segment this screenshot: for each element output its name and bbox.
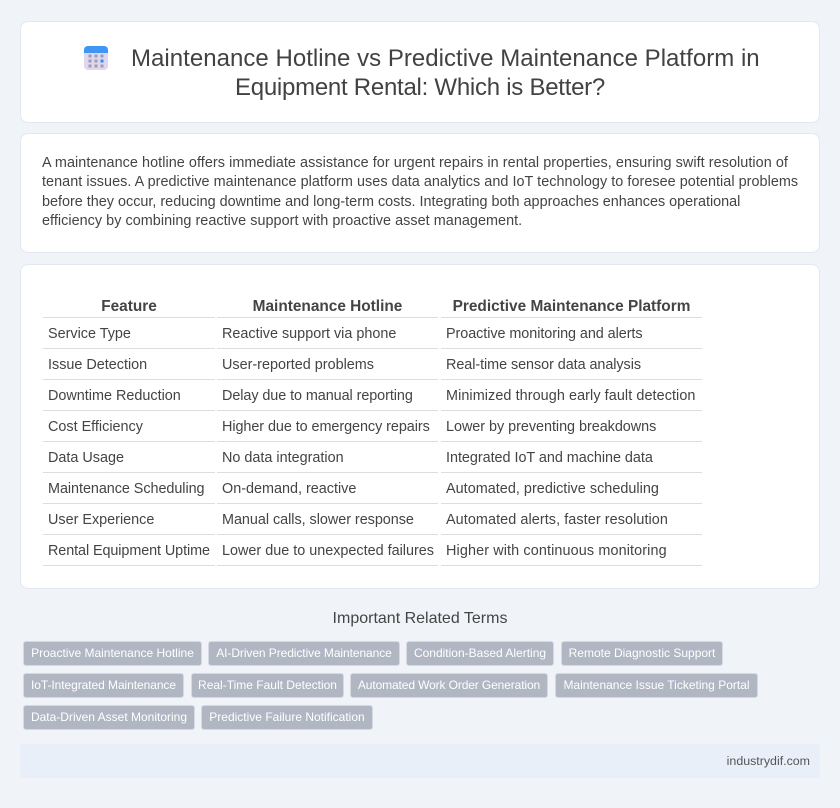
row: cost efficiency: Cost Efficiency [48, 419, 143, 435]
tag: Data-Driven Asset Monitoring [31, 710, 187, 724]
tag [561, 641, 723, 666]
table header [101, 298, 690, 315]
tag [201, 705, 373, 730]
tag: Remote Diagnostic Support [569, 646, 715, 660]
row: rental equipment uptime: Lower due to unexpected failures [222, 543, 434, 559]
row: data usage: Data Usage [48, 450, 124, 466]
row: service type: Service Type [48, 326, 131, 342]
tag: IoT-Integrated Maintenance [31, 678, 176, 692]
tag [555, 673, 758, 698]
tag: Condition-Based Alerting [414, 646, 546, 660]
panel: introduction [20, 133, 820, 253]
tag: Real-Time Fault Detection [198, 678, 337, 692]
tag: Predictive Failure Notification [209, 710, 365, 724]
row: user experience: Manual calls, slower response [222, 512, 414, 528]
row: user experience: User Experience [48, 512, 154, 528]
row: downtime reduction: Delay due to manual reporting [222, 388, 413, 404]
heading: important related terms: Important Related Terms [333, 610, 507, 627]
row: maintenance scheduling [48, 481, 659, 497]
row: data usage: No data integration [222, 450, 344, 466]
row: service type: Reactive support via phone [222, 326, 396, 342]
row: cost efficiency [48, 419, 656, 435]
title: Maintenance Hotline vs Predictive Maintenance Platform in [131, 45, 760, 72]
tag: Automated Work Order Generation [358, 678, 540, 692]
row: user experience [48, 512, 668, 528]
row: downtime reduction: Downtime Reduction [48, 388, 181, 404]
row: issue detection: Issue Detection [48, 357, 147, 373]
intro text: efficiency by combining reactive support with proactive asset management. [42, 213, 522, 229]
table header: Predictive Maintenance Platform [453, 298, 690, 315]
intro text: before they occur, reducing downtime and long-term costs. Integrating both approaches enhances operational [42, 194, 740, 210]
tag: AI-Driven Predictive Maintenance [216, 646, 392, 660]
tag [208, 641, 400, 666]
row: rental equipment uptime: Higher with continuous monitoring [446, 543, 667, 559]
tag: Maintenance Issue Ticketing Portal [563, 678, 750, 692]
row: issue detection: User-reported problems [222, 357, 374, 373]
related term tags [23, 641, 758, 730]
row: issue detection: Real-time sensor data analysis [446, 357, 641, 373]
row: maintenance scheduling: On-demand, reactive [222, 481, 356, 497]
table header: Feature [101, 298, 157, 315]
intro text [42, 155, 798, 229]
title [131, 45, 760, 101]
tag [191, 673, 344, 698]
panel: title card [20, 21, 820, 123]
row: maintenance scheduling: Maintenance Scheduling [48, 481, 205, 497]
row: cost efficiency: Higher due to emergency repairs [222, 419, 430, 435]
intro text: tenant issues. A predictive maintenance platform uses data analytics and IoT technology to foresee potential problems [42, 174, 798, 190]
row: downtime reduction: Minimized through early fault detection [446, 388, 696, 404]
tag [23, 641, 202, 666]
footer source text: industrydif.com [727, 754, 810, 768]
title: Equipment Rental: Which is Better? [235, 74, 605, 101]
comparison table [43, 298, 702, 566]
row: downtime reduction [48, 388, 696, 404]
tag [23, 673, 184, 698]
tag: Proactive Maintenance Hotline [31, 646, 194, 660]
row: cost efficiency: Lower by preventing breakdowns [446, 419, 656, 435]
row: data usage [48, 450, 653, 466]
footer [20, 744, 820, 778]
row: issue detection [48, 357, 641, 373]
row: data usage: Integrated IoT and machine data [446, 450, 653, 466]
row: service type: Proactive monitoring and alerts [446, 326, 643, 342]
row: rental equipment uptime: Rental Equipment Uptime [48, 543, 210, 559]
tag [406, 641, 554, 666]
tag [23, 705, 195, 730]
row: service type [48, 326, 643, 342]
icon: calendar [84, 46, 108, 70]
intro text: A maintenance hotline offers immediate assistance for urgent repairs in rental properties, ensuring swift resolution of [42, 155, 788, 171]
row: rental equipment uptime [48, 543, 667, 559]
table header: Maintenance Hotline [253, 298, 402, 315]
row: maintenance scheduling: Automated, predictive scheduling [446, 481, 659, 497]
tag [350, 673, 548, 698]
panel: comparison table [20, 264, 820, 589]
row: user experience: Automated alerts, faster resolution [446, 512, 668, 528]
